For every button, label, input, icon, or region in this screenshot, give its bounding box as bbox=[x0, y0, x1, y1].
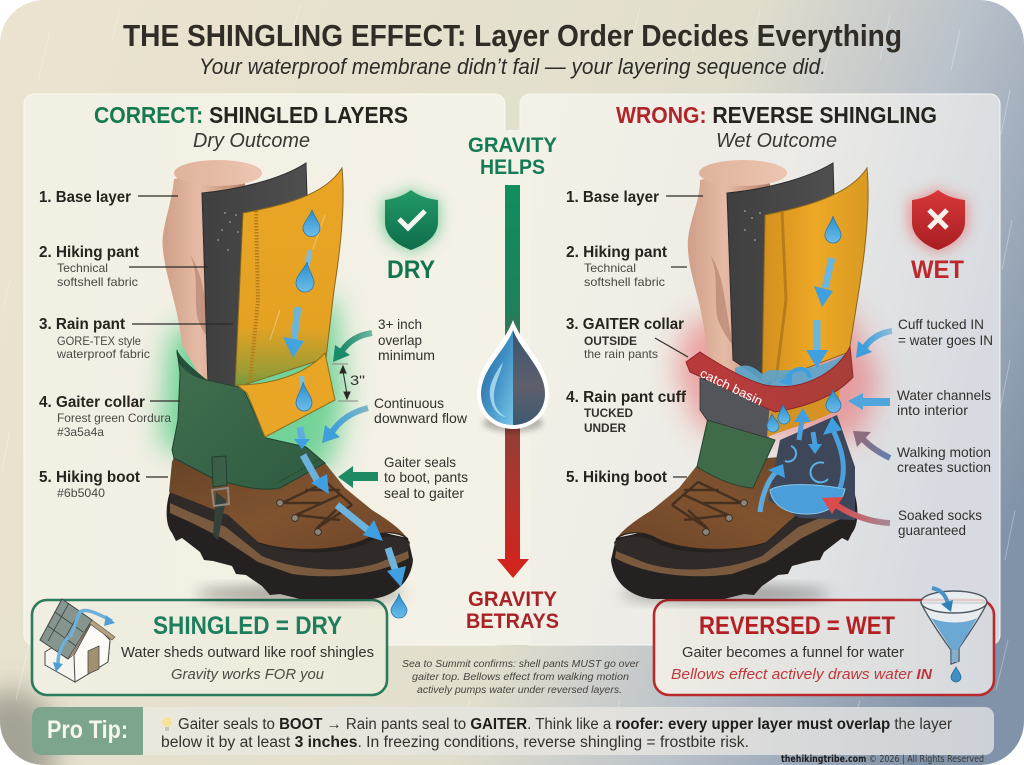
channel note bbox=[897, 387, 991, 418]
green glow bbox=[160, 300, 345, 470]
gravity betrays label: BETRAYS bbox=[466, 610, 559, 633]
source note: Sea to Summit confirms: shell pants MUST go over bbox=[402, 658, 639, 670]
source note: gaiter top. Bellows effect from walking motion bbox=[412, 671, 629, 683]
back gaiter rim bbox=[177, 350, 207, 380]
suction note: creates suction bbox=[897, 459, 991, 475]
seal note: Gaiter seals bbox=[384, 454, 456, 470]
dry label: DRY bbox=[387, 256, 435, 284]
overlap note: 3+ inch bbox=[378, 316, 422, 332]
label 3: the rain pants bbox=[584, 347, 658, 361]
seal note: to boot, pants bbox=[384, 469, 468, 485]
heading: wrong: WRONG: REVERSE SHINGLING bbox=[616, 102, 937, 128]
label 5: 5. Hiking boot bbox=[566, 469, 668, 486]
label 5: #6b5040 bbox=[57, 486, 105, 500]
gaiter lower bbox=[697, 418, 775, 488]
copyright footer: thehikingtribe.com © 2026 | All Rights Reserved bbox=[781, 754, 984, 765]
seal note: seal to gaiter bbox=[384, 485, 464, 501]
gravity helps label bbox=[468, 134, 557, 179]
hiking pant layer bbox=[202, 163, 308, 390]
illustration: wrong boot layers bbox=[611, 160, 892, 602]
red glow bbox=[675, 310, 880, 440]
label 3: 3. Rain pant bbox=[39, 316, 126, 333]
gaiter seams bbox=[277, 447, 320, 483]
subheading: wet outcome: Wet Outcome bbox=[716, 130, 837, 152]
bottom callout: shingled bbox=[32, 599, 387, 695]
leg bbox=[163, 160, 262, 385]
icon: dry shield bbox=[382, 188, 440, 252]
fabric highlights bbox=[190, 215, 325, 474]
labels: correct layers bbox=[39, 189, 233, 500]
source note bbox=[402, 658, 639, 696]
label 2 bbox=[39, 244, 208, 289]
leg bbox=[688, 160, 787, 385]
label 2: 2. Hiking pant bbox=[39, 244, 140, 261]
label 2 bbox=[566, 244, 687, 289]
label 2: Technical bbox=[57, 261, 108, 275]
label 3: waterproof fabric bbox=[56, 347, 150, 361]
water arrows bbox=[760, 216, 843, 512]
annotations: wrong bbox=[897, 316, 993, 538]
label 1: 1. Base layer bbox=[39, 189, 131, 206]
icon: funnel bbox=[921, 588, 987, 682]
icon: wet shield bbox=[909, 188, 967, 252]
subtitle: Your waterproof membrane didn’t fail — your layering sequence did. bbox=[199, 54, 826, 79]
label 4: 4. Rain pant cuff bbox=[566, 389, 687, 406]
pro tip line 2: below it by at least 3 inches. In freezing conditions, reverse shingling = frostbite risk. bbox=[161, 734, 749, 751]
label 5 bbox=[39, 469, 168, 500]
cuff note: Cuff tucked IN bbox=[898, 316, 984, 332]
gravity helps label: GRAVITY bbox=[468, 134, 557, 157]
callout emphasis: Gravity works FOR you bbox=[171, 666, 325, 683]
arrow: channel callout bbox=[848, 393, 890, 410]
subheading: dry outcome: Dry Outcome bbox=[193, 130, 310, 152]
panel: correct bbox=[24, 94, 505, 645]
cuff note: = water goes IN bbox=[898, 332, 993, 348]
label 4: #3a5a4a bbox=[57, 425, 104, 439]
overlap note: minimum bbox=[378, 347, 435, 363]
label 3 bbox=[566, 316, 688, 361]
label 5: 5. Hiking boot bbox=[39, 469, 141, 486]
overlap note bbox=[378, 316, 435, 363]
label 2: softshell fabric bbox=[57, 275, 138, 289]
icon: shingled house bbox=[40, 599, 115, 682]
rain pant overlap flap bbox=[237, 353, 335, 437]
cuff note bbox=[898, 316, 993, 348]
rain pant layer bbox=[235, 168, 343, 388]
socks note bbox=[898, 507, 982, 538]
label 2: Technical bbox=[584, 261, 636, 275]
panel: wrong bbox=[520, 94, 1000, 645]
label 4 bbox=[566, 389, 687, 435]
pro tip bar bbox=[32, 707, 994, 755]
boot bbox=[611, 452, 857, 599]
suction note bbox=[897, 444, 991, 475]
label 4: Forest green Cordura bbox=[57, 411, 171, 425]
label 1: 1. Base layer bbox=[566, 189, 659, 206]
flow note bbox=[374, 395, 468, 426]
label 4 bbox=[39, 394, 180, 439]
flow note: Continuous bbox=[374, 395, 444, 411]
catch basin label: catch basin bbox=[698, 366, 765, 409]
label 4: UNDER bbox=[584, 421, 626, 435]
label 3: GORE-TEX style bbox=[57, 334, 141, 348]
gravity betrays label bbox=[466, 588, 559, 633]
gaiter interior bbox=[768, 415, 855, 520]
center panel join bbox=[495, 130, 530, 645]
pooled water bbox=[735, 352, 848, 392]
callout emphasis: Bellows effect actively draws water IN bbox=[671, 666, 933, 683]
title: THE SHINGLING EFFECT: Layer Order Decides Everything bbox=[123, 18, 902, 53]
soaked pool bbox=[770, 485, 845, 514]
gaiter strap bbox=[212, 456, 229, 540]
label 4: 4. Gaiter collar bbox=[39, 394, 145, 411]
callout heading: REVERSED = WET bbox=[699, 612, 895, 640]
pro tip label: Pro Tip: bbox=[47, 716, 128, 744]
icon: drip bbox=[951, 667, 961, 682]
suction note: Walking motion bbox=[897, 444, 991, 460]
overlap note: overlap bbox=[378, 332, 422, 348]
gravity arrow bbox=[497, 185, 529, 578]
boot shadow bbox=[195, 586, 405, 602]
arrow: cuff callout bbox=[856, 331, 892, 358]
callout heading: SHINGLED = DRY bbox=[153, 612, 342, 640]
pro tip line 1: Gaiter seals to BOOT → Rain pants seal to GAITER. Think like a roofer: every upper layer must overlap the layer bbox=[178, 716, 952, 733]
label 2: 2. Hiking pant bbox=[566, 244, 668, 261]
3 inch label: 3" bbox=[350, 372, 365, 388]
source note: actively pumps water under reversed layers. bbox=[417, 684, 622, 696]
icon: center water drop bbox=[477, 320, 549, 432]
3 inch marker bbox=[332, 364, 358, 401]
label 3: 3. GAITER collar bbox=[566, 316, 684, 333]
annotations: correct bbox=[374, 316, 468, 501]
cuff bbox=[700, 378, 770, 438]
arrow: socks callout bbox=[822, 497, 890, 523]
arrow: flow callout bbox=[322, 408, 368, 443]
callout text: Water sheds outward like roof shingles bbox=[121, 644, 374, 661]
boot bbox=[167, 452, 413, 599]
arrow: seal callout bbox=[338, 466, 378, 488]
heading: correct: CORRECT: SHINGLED LAYERS bbox=[94, 102, 408, 128]
gravity betrays label: GRAVITY bbox=[468, 588, 557, 611]
rain pant layer bbox=[762, 168, 868, 385]
water flow drops and arrows bbox=[283, 210, 407, 618]
red collar bbox=[686, 347, 853, 412]
bottom callout: reversed bbox=[654, 588, 994, 695]
arrow: overlap callout bbox=[333, 333, 372, 362]
channel note: into interior bbox=[897, 402, 968, 418]
labels: wrong layers bbox=[566, 189, 703, 486]
seal note bbox=[384, 454, 468, 501]
flow note: downward flow bbox=[374, 410, 468, 426]
icon: light bulb bbox=[162, 717, 172, 731]
illustration: correct boot layers bbox=[160, 160, 413, 618]
wet label: WET bbox=[911, 256, 964, 284]
label 2: softshell fabric bbox=[584, 275, 665, 289]
pro tip tag bbox=[32, 707, 143, 755]
label 3: OUTSIDE bbox=[584, 334, 637, 348]
gravity helps label: HELPS bbox=[480, 156, 545, 179]
swirl bbox=[785, 446, 796, 462]
hiking pant layer bbox=[727, 163, 835, 385]
callout text: Gaiter becomes a funnel for water bbox=[682, 644, 904, 661]
socks note: guaranteed bbox=[898, 522, 966, 538]
channel note: Water channels bbox=[897, 387, 991, 403]
arrow: suction callout bbox=[853, 431, 890, 458]
boot shadow bbox=[620, 586, 830, 602]
label 3 bbox=[39, 316, 233, 361]
gaiter bbox=[172, 350, 325, 489]
socks note: Soaked socks bbox=[898, 507, 982, 523]
label 4: TUCKED bbox=[584, 406, 633, 420]
